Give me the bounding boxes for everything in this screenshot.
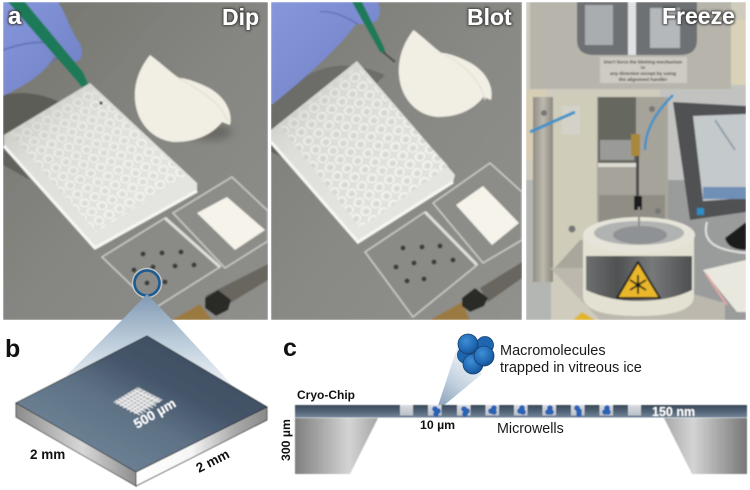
well plate bbox=[4, 83, 197, 248]
glove holding tweezers bbox=[3, 2, 82, 96]
computer monitor bbox=[673, 102, 746, 220]
microwell grid bbox=[113, 387, 163, 415]
left silicon support bbox=[295, 418, 378, 474]
blue cables bbox=[530, 112, 575, 132]
well plate bbox=[271, 61, 455, 242]
metal strip and clamp bbox=[480, 262, 522, 302]
label Dip: Dip bbox=[222, 4, 259, 30]
empty well right bbox=[628, 405, 641, 416]
10 µm label: 10 µm bbox=[420, 418, 455, 432]
instrument base bbox=[550, 268, 725, 320]
filter paper bbox=[399, 30, 492, 117]
300 µm label: 300 µm bbox=[279, 419, 293, 461]
chip top surface bbox=[16, 336, 267, 472]
label Blot: Blot bbox=[467, 4, 512, 30]
circle highlight on chip bbox=[132, 268, 162, 298]
panel label b: b bbox=[5, 335, 20, 363]
warning label on instrument bbox=[600, 57, 687, 83]
wells with particles bbox=[428, 405, 613, 417]
warning label on instrument: Don't force the blotting mechanism bbox=[604, 60, 682, 64]
2 mm right label: 2 mm bbox=[194, 446, 232, 476]
cold hazard sign bbox=[617, 262, 660, 298]
warning label on instrument: in bbox=[641, 65, 645, 70]
chips in box bbox=[132, 250, 196, 286]
chip left side bbox=[16, 403, 136, 486]
macromolecules caption: trapped in vitreous ice bbox=[500, 360, 642, 376]
label a: a bbox=[8, 3, 22, 30]
panel label c: c bbox=[283, 334, 297, 362]
cone to chip detail bbox=[66, 294, 233, 386]
warning label on instrument: any direction except by using bbox=[610, 71, 676, 76]
2 mm left label: 2 mm bbox=[30, 447, 65, 462]
chip box base bbox=[102, 218, 220, 308]
instrument head bbox=[530, 2, 731, 89]
500 µm label: 500 µm bbox=[131, 396, 178, 432]
membrane bar bbox=[295, 405, 747, 418]
open chip box lid bbox=[173, 177, 268, 268]
instrument column bbox=[555, 96, 668, 268]
macromolecule cluster bbox=[458, 334, 494, 374]
keyboard bbox=[703, 260, 746, 312]
empty well left bbox=[400, 405, 413, 416]
Cryo-Chip label: Cryo-Chip bbox=[297, 388, 355, 402]
cone to macromolecules bbox=[436, 345, 482, 412]
open chip box lid bbox=[433, 163, 522, 263]
chip box base bbox=[365, 212, 477, 317]
panel c: chip cross-section bbox=[295, 405, 747, 474]
warning label on instrument: the alignment handle! bbox=[619, 77, 668, 82]
filter paper bbox=[135, 55, 231, 142]
macromolecules caption: Macromolecules bbox=[500, 343, 606, 359]
right silicon support bbox=[664, 418, 747, 474]
150 nm label: 150 nm bbox=[652, 405, 695, 419]
liquid nitrogen dewar bbox=[583, 207, 695, 316]
label Freeze: Freeze bbox=[662, 3, 735, 29]
chips in box bbox=[394, 244, 456, 284]
panel b: chip isometric diagram bbox=[16, 336, 267, 486]
Microwells label: Microwells bbox=[497, 421, 564, 437]
glove holding tweezers bbox=[271, 2, 380, 104]
panel a: Freeze photograph bbox=[526, 2, 746, 320]
metal strip and clamp bbox=[206, 264, 268, 303]
panel a: Blot photograph bbox=[271, 2, 522, 320]
panel a: Dip photograph bbox=[3, 2, 268, 320]
chip right side bbox=[136, 407, 267, 486]
